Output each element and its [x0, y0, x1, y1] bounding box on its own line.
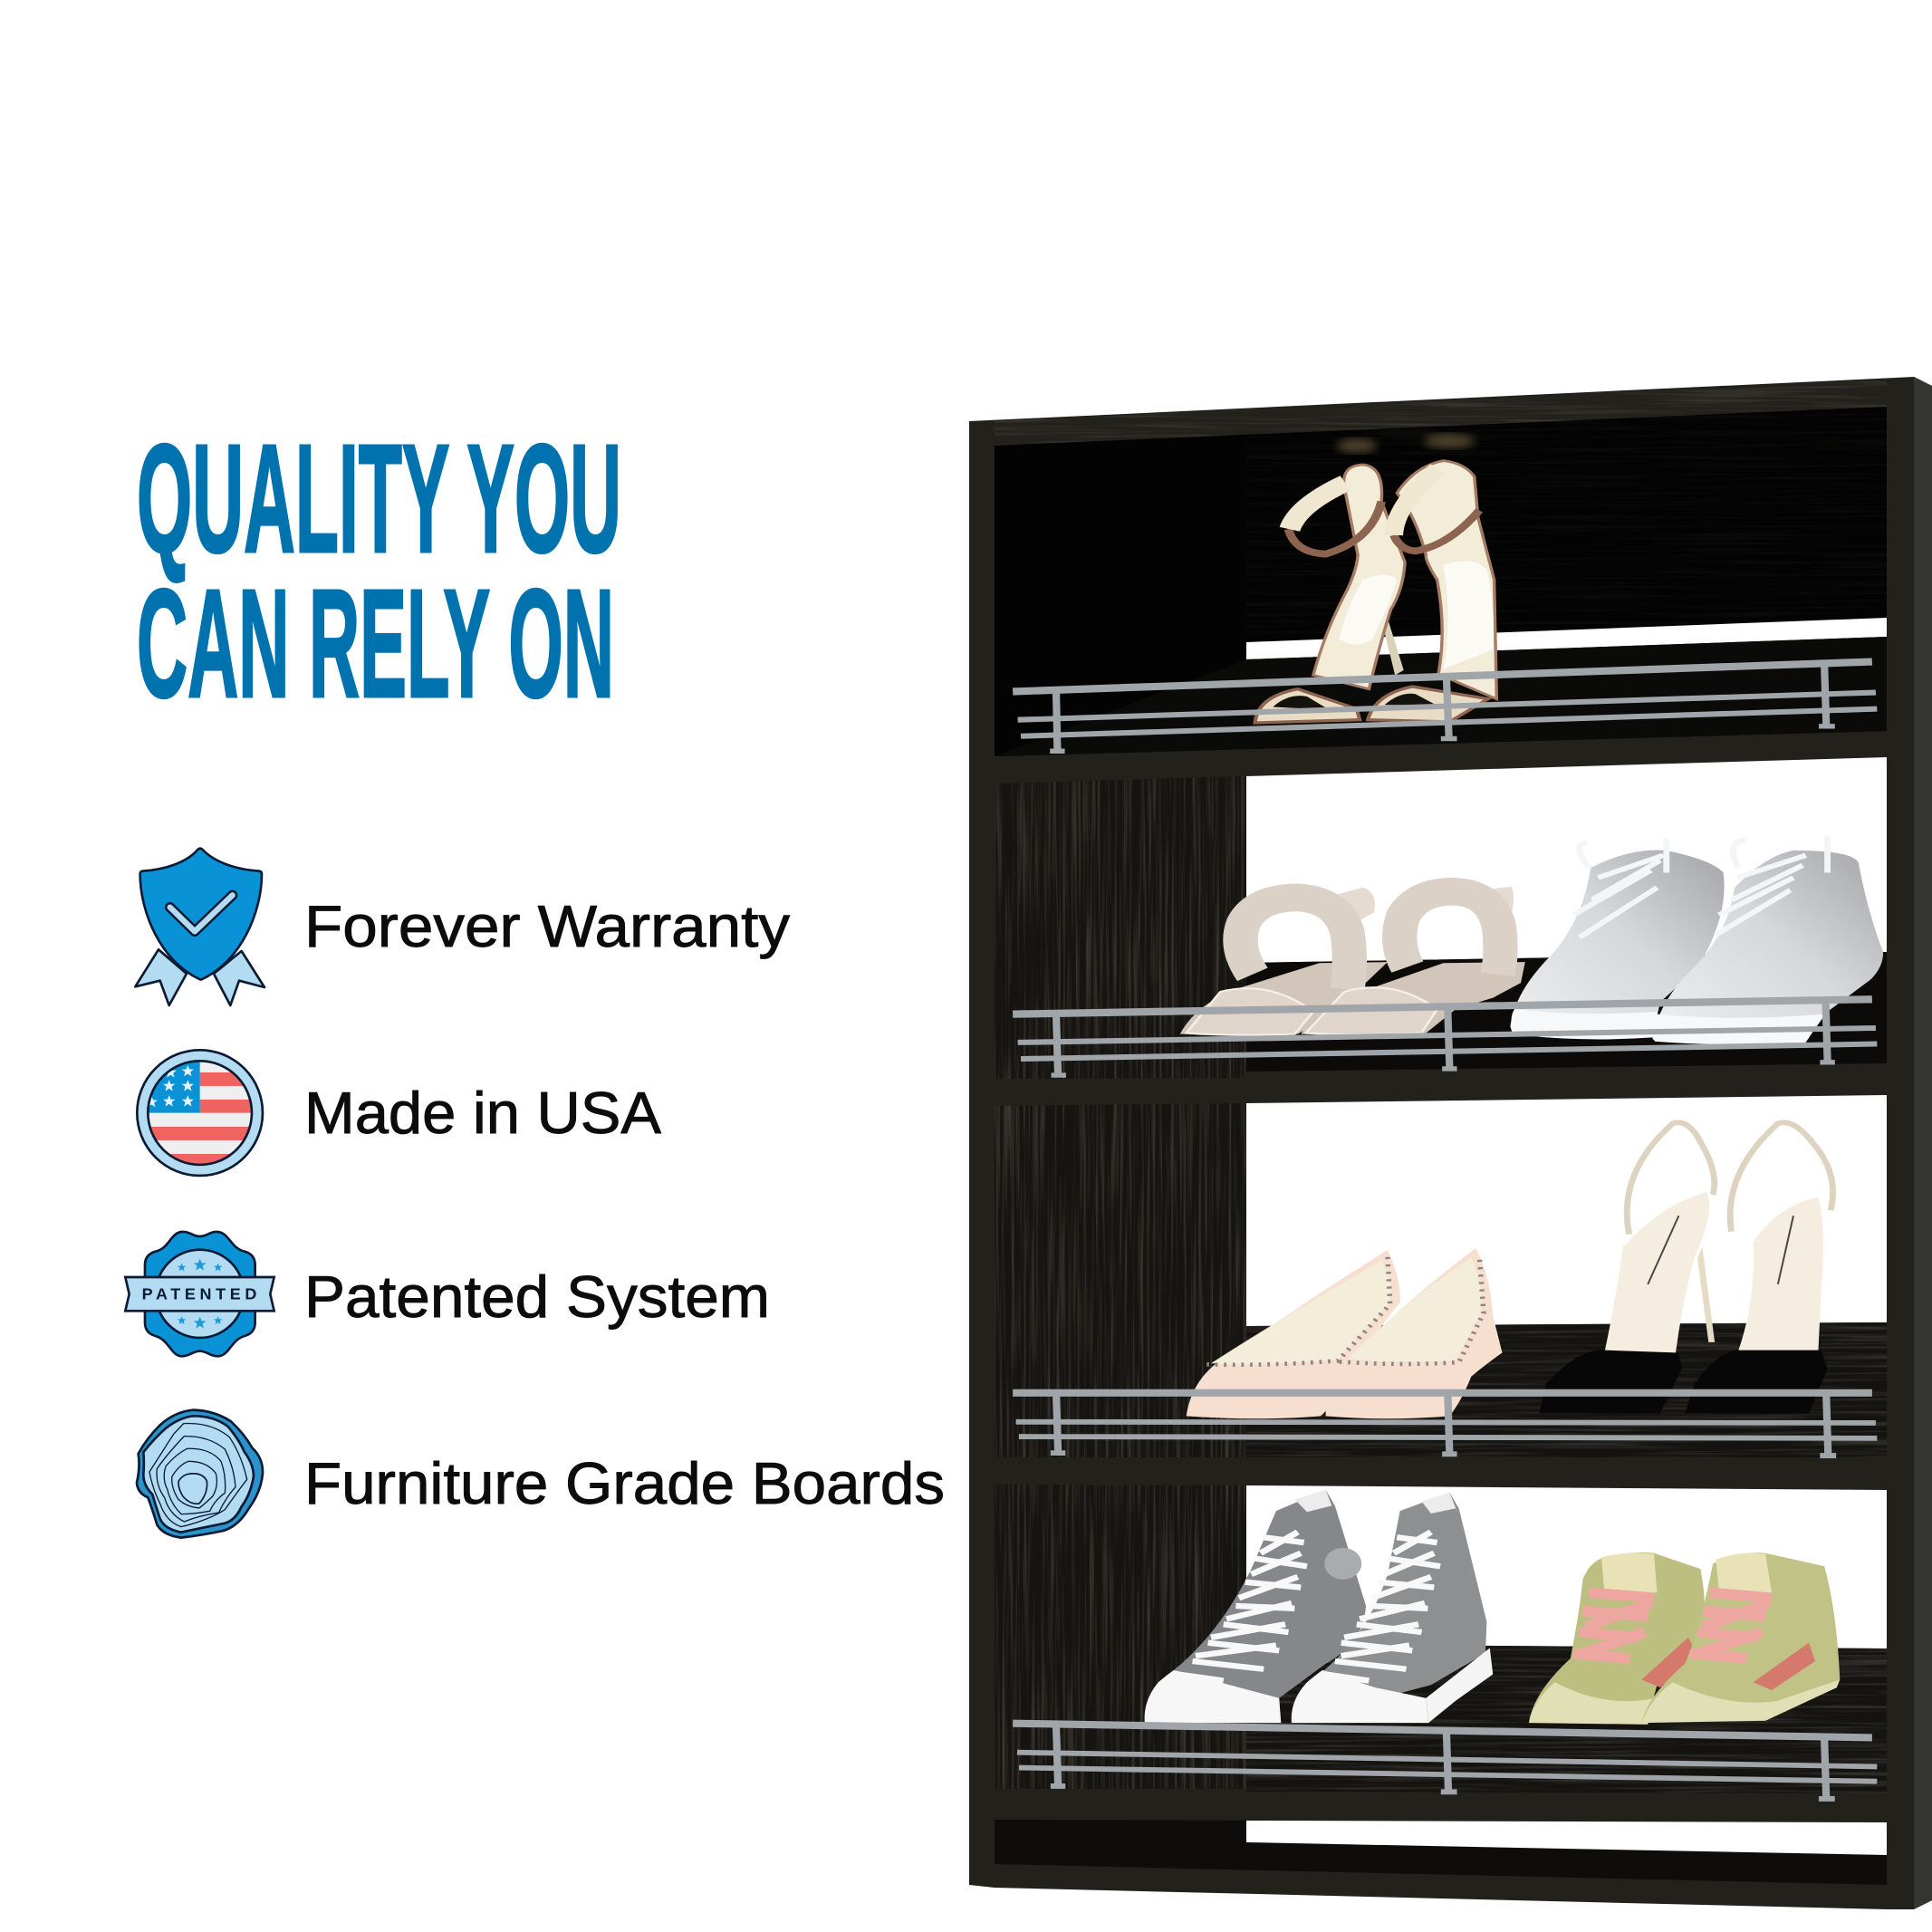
icon: usa flag [137, 1050, 263, 1176]
shoes: studded flats [1187, 1248, 1502, 1418]
text: forever warranty: Forever Warranty [304, 893, 791, 959]
text: patented system: Patented System [304, 1264, 770, 1330]
shelf row 4 [995, 1485, 1887, 1793]
text: made in usa: Made in USA [304, 1080, 662, 1146]
icon: warranty shield [135, 849, 264, 1005]
title [137, 413, 621, 730]
rack frame [969, 377, 1932, 1909]
text: CAN RELY ON [137, 558, 614, 730]
rail row 1 [1013, 662, 1877, 751]
shoes: grey high tops [1145, 1490, 1493, 1723]
shelf row 5 [995, 1820, 1887, 1885]
icon: wood rings [137, 1410, 263, 1538]
shoes: ankle strap heels [1255, 461, 1496, 723]
shoes: slingback heels [1540, 1122, 1833, 1413]
text: furniture grade boards: Furniture Grade Boards [304, 1450, 945, 1516]
rail row 3 [1013, 1393, 1877, 1456]
icon: patented badge [125, 1232, 274, 1356]
shoes: beige sandals [1180, 887, 1525, 1035]
text: QUALITY YOU [137, 413, 621, 585]
shelf row 2 [995, 757, 1887, 1079]
shoes: floral high tops [1529, 1552, 1840, 1725]
rail row 4 [1013, 1724, 1877, 1799]
rail row 2 [1013, 999, 1877, 1075]
shoes: grey sneakers [1510, 835, 1883, 1044]
shoe rack [969, 377, 1932, 1909]
shelf row 1 [995, 407, 1887, 756]
icon: patented badge: PATENTED [142, 1284, 256, 1302]
shelf row 3 [995, 1095, 1887, 1457]
feature list [125, 849, 945, 1538]
